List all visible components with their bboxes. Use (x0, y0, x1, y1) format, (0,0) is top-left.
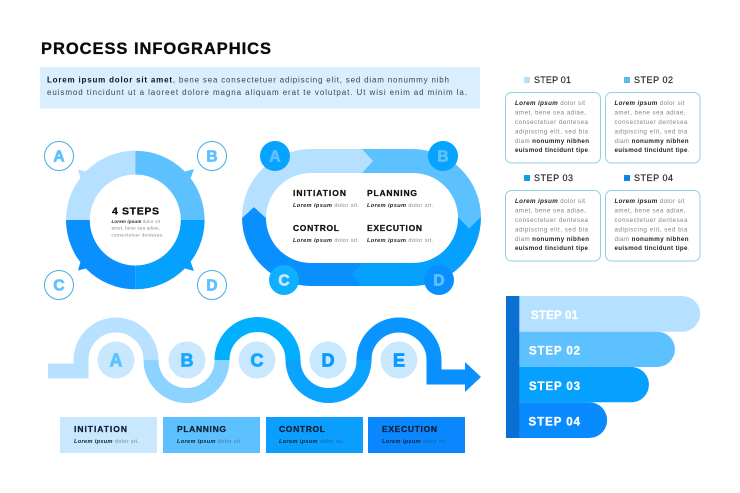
card: step 03: STEP 03 (534, 173, 573, 183)
bar: step 04 (510, 402, 607, 438)
card: step 03: amet, bene sea adiae, (515, 208, 586, 214)
badge D (198, 270, 226, 300)
donut centre text: 4 STEPS (112, 206, 159, 218)
wave node C (238, 342, 276, 378)
donut segment B (135, 151, 205, 220)
card: step 01: STEP 01 (534, 75, 571, 85)
box: initiation (60, 417, 157, 453)
card: step 01: amet, bene sea adiae, (515, 110, 586, 116)
item: control: Lorem ipsum dolor sit. (293, 238, 359, 244)
card: step 02: adipiscing elit, sed bia (614, 128, 688, 135)
donut segment A (66, 151, 135, 220)
card: step 01: euismod tincidunt tipe. (515, 147, 590, 154)
box: initiation: INITIATION (74, 424, 127, 434)
badge B (198, 142, 226, 170)
card: step 01: consectetuer dentesea (515, 119, 589, 126)
wave node D (310, 342, 346, 378)
panel: wave timeline (48, 324, 481, 396)
node C (269, 265, 299, 295)
card: step 01: Lorem ipsum dolor sit (515, 100, 585, 107)
box: initiation: Lorem ipsum dolor sit. (74, 439, 139, 445)
bar: step 02 (510, 332, 675, 367)
card: step 03: euismod tincidunt tipe. (515, 245, 590, 252)
node B: B (437, 148, 449, 166)
card: step 02: consectetuer dentesea (614, 119, 688, 126)
item: initiation: INITIATION (293, 188, 346, 198)
bar: step 03: STEP 03 (529, 381, 580, 393)
intro text block (40, 67, 480, 108)
donut centre text: amet, bene sea adiae, (112, 226, 160, 231)
bar: step 01: STEP 01 (531, 310, 579, 322)
node A: A (269, 148, 281, 166)
box: execution: EXECUTION (382, 424, 437, 434)
bar: step 03 (510, 367, 649, 402)
card: step 04: consectetuer dentesea (614, 217, 688, 224)
bar: step 01 (510, 296, 700, 332)
wave node B (168, 342, 206, 378)
node B (428, 141, 458, 171)
node C: C (278, 272, 290, 290)
item: execution: Lorem ipsum dolor sit. (367, 238, 433, 244)
box: planning (163, 417, 260, 453)
wave node E (380, 342, 418, 378)
card: step 03: diam nonummy nibhen (515, 236, 589, 243)
card: step 04: adipiscing elit, sed bia (614, 226, 688, 233)
card: step 04 (606, 173, 700, 261)
card: step 04: diam nonummy nibhen (614, 236, 689, 243)
wave node C: C (250, 350, 264, 370)
card: step 04: amet, bene sea adiae, (614, 208, 686, 214)
badge A (44, 142, 74, 170)
badge A: A (53, 148, 65, 166)
wave node B: B (180, 350, 194, 370)
donut centre text (112, 206, 164, 237)
item: planning (367, 188, 433, 209)
card: step 03: consectetuer dentesea (515, 217, 589, 224)
card: step 02: STEP 02 (634, 75, 673, 85)
infographic canvas (40, 42, 700, 453)
badge C (44, 270, 74, 300)
card: step 01 (506, 75, 600, 163)
panel: racetrack cycle (242, 141, 481, 295)
cycle arrow band (242, 149, 481, 286)
card: step 04: Lorem ipsum dolor sit (614, 198, 685, 205)
box: planning: Lorem ipsum dolor sit. (177, 439, 242, 445)
box: control: CONTROL (279, 424, 325, 434)
wave node E: E (393, 350, 405, 370)
card: step 02: euismod tincidunt tipe. (614, 147, 690, 154)
donut segment C (66, 220, 135, 289)
card: step 01: diam nonummy nibhen (515, 138, 589, 145)
wave node A: A (110, 350, 122, 370)
wave ribbon (48, 324, 466, 396)
item: control: CONTROL (293, 223, 339, 233)
node D (424, 265, 454, 295)
item: initiation: Lorem ipsum dolor sit. (293, 203, 359, 209)
card: step 03: Lorem ipsum dolor sit (515, 198, 585, 205)
badge B: B (206, 148, 218, 166)
card: step 04: STEP 04 (634, 173, 673, 183)
bar spine (506, 296, 519, 438)
card: step 01: adipiscing elit, sed bia (515, 128, 589, 135)
item: control (293, 223, 359, 244)
card: step 03: adipiscing elit, sed bia (515, 226, 589, 233)
item: planning: Lorem ipsum dolor sit. (367, 203, 433, 209)
arrow head (465, 362, 481, 392)
badge C: C (53, 278, 65, 294)
intro text block: Lorem ipsum dolor sit amet, bene sea consectetuer adipiscing elit, sed diam nonummy nibh (47, 76, 449, 84)
item: execution (367, 223, 433, 244)
panel: stacked step bars (506, 296, 700, 438)
node D: D (433, 272, 445, 290)
bar: step 02: STEP 02 (529, 346, 580, 358)
panel: donut 4 steps (44, 142, 226, 300)
box: control (266, 417, 363, 453)
node A (260, 141, 290, 171)
box: execution (368, 417, 465, 453)
badge D: D (206, 278, 218, 294)
box: planning: PLANNING (177, 424, 226, 434)
intro text block: euismod tincidunt ut a laoreet dolore magna aliquam erat te volutpat. Ut wisi enim ad minim la. (47, 88, 467, 97)
donut centre text: consectetuer dentesea. (112, 232, 164, 237)
cycle inner panel (266, 173, 458, 263)
card: step 03 (506, 173, 600, 261)
panel: step cards (506, 75, 700, 261)
bar: step 04: STEP 04 (528, 416, 581, 428)
item: execution: EXECUTION (367, 223, 422, 233)
donut centre text: Lorem ipsum dolor sit (112, 219, 161, 224)
title: PROCESS INFOGRAPHICS (41, 40, 271, 58)
donut segment D (135, 220, 205, 289)
wave node A (98, 342, 134, 378)
box: execution: Lorem ipsum dolor sit. (382, 439, 447, 445)
card: step 02: Lorem ipsum dolor sit (614, 100, 685, 107)
card: step 02 (606, 75, 700, 163)
item: planning: PLANNING (367, 188, 417, 198)
card: step 02: diam nonummy nibhen (614, 138, 689, 145)
box: control: Lorem ipsum dolor sit. (279, 439, 344, 445)
item: initiation (293, 188, 359, 209)
wave node D: D (322, 350, 334, 370)
card: step 02: amet, bene sea adiae, (614, 110, 686, 116)
card: step 04: euismod tincidunt tipe. (614, 245, 690, 252)
